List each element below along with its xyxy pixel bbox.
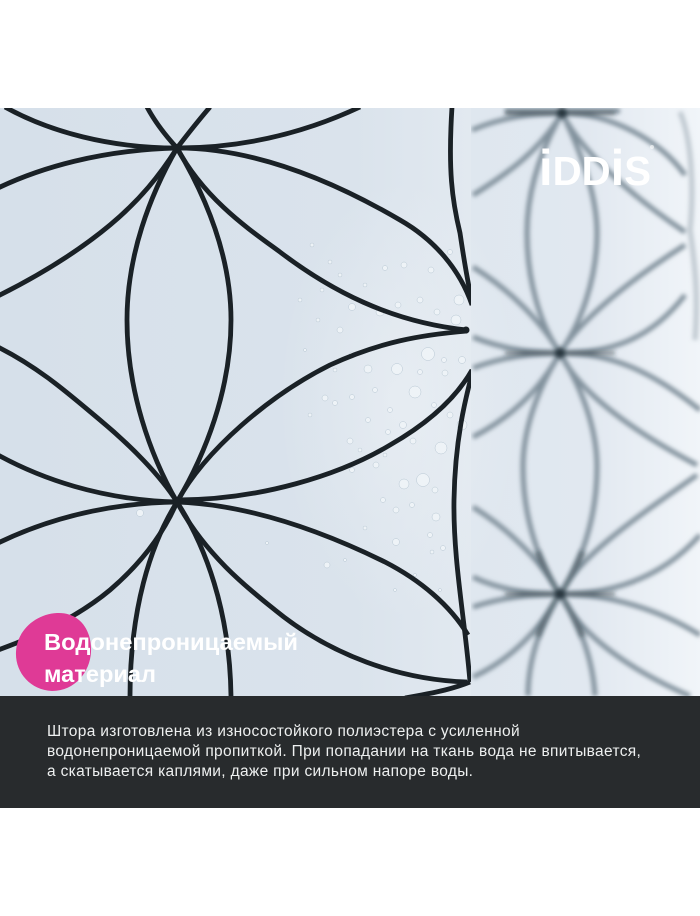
description text: Штора изготовлена из износостойкого полиэстера с усиленной (47, 723, 520, 740)
photo panel with curtain pattern, logo and heading (0, 108, 700, 696)
blurred curtain pattern on the right (472, 108, 700, 696)
description text (47, 723, 641, 780)
dark description panel (0, 696, 700, 808)
description text: водонепроницаемой пропиткой. При попадании на ткань вода не впитывается, (47, 743, 641, 760)
description text: а скатывается каплями, даже при сильном напоре воды. (47, 763, 473, 780)
photo background (0, 108, 700, 696)
heading: Водонепроницаемый (44, 629, 298, 655)
lower node lines (0, 502, 468, 635)
right side edge lines (450, 107, 473, 305)
pattern knots (173, 144, 470, 506)
logo: IDDIS: iDDiS (539, 140, 651, 196)
upper node lines (5, 107, 360, 148)
pink blob accent (16, 613, 91, 691)
middle node lines (177, 331, 467, 502)
heading: материал (44, 661, 156, 687)
water droplets (136, 243, 467, 592)
curtain pattern: flower of life lines (0, 107, 473, 698)
